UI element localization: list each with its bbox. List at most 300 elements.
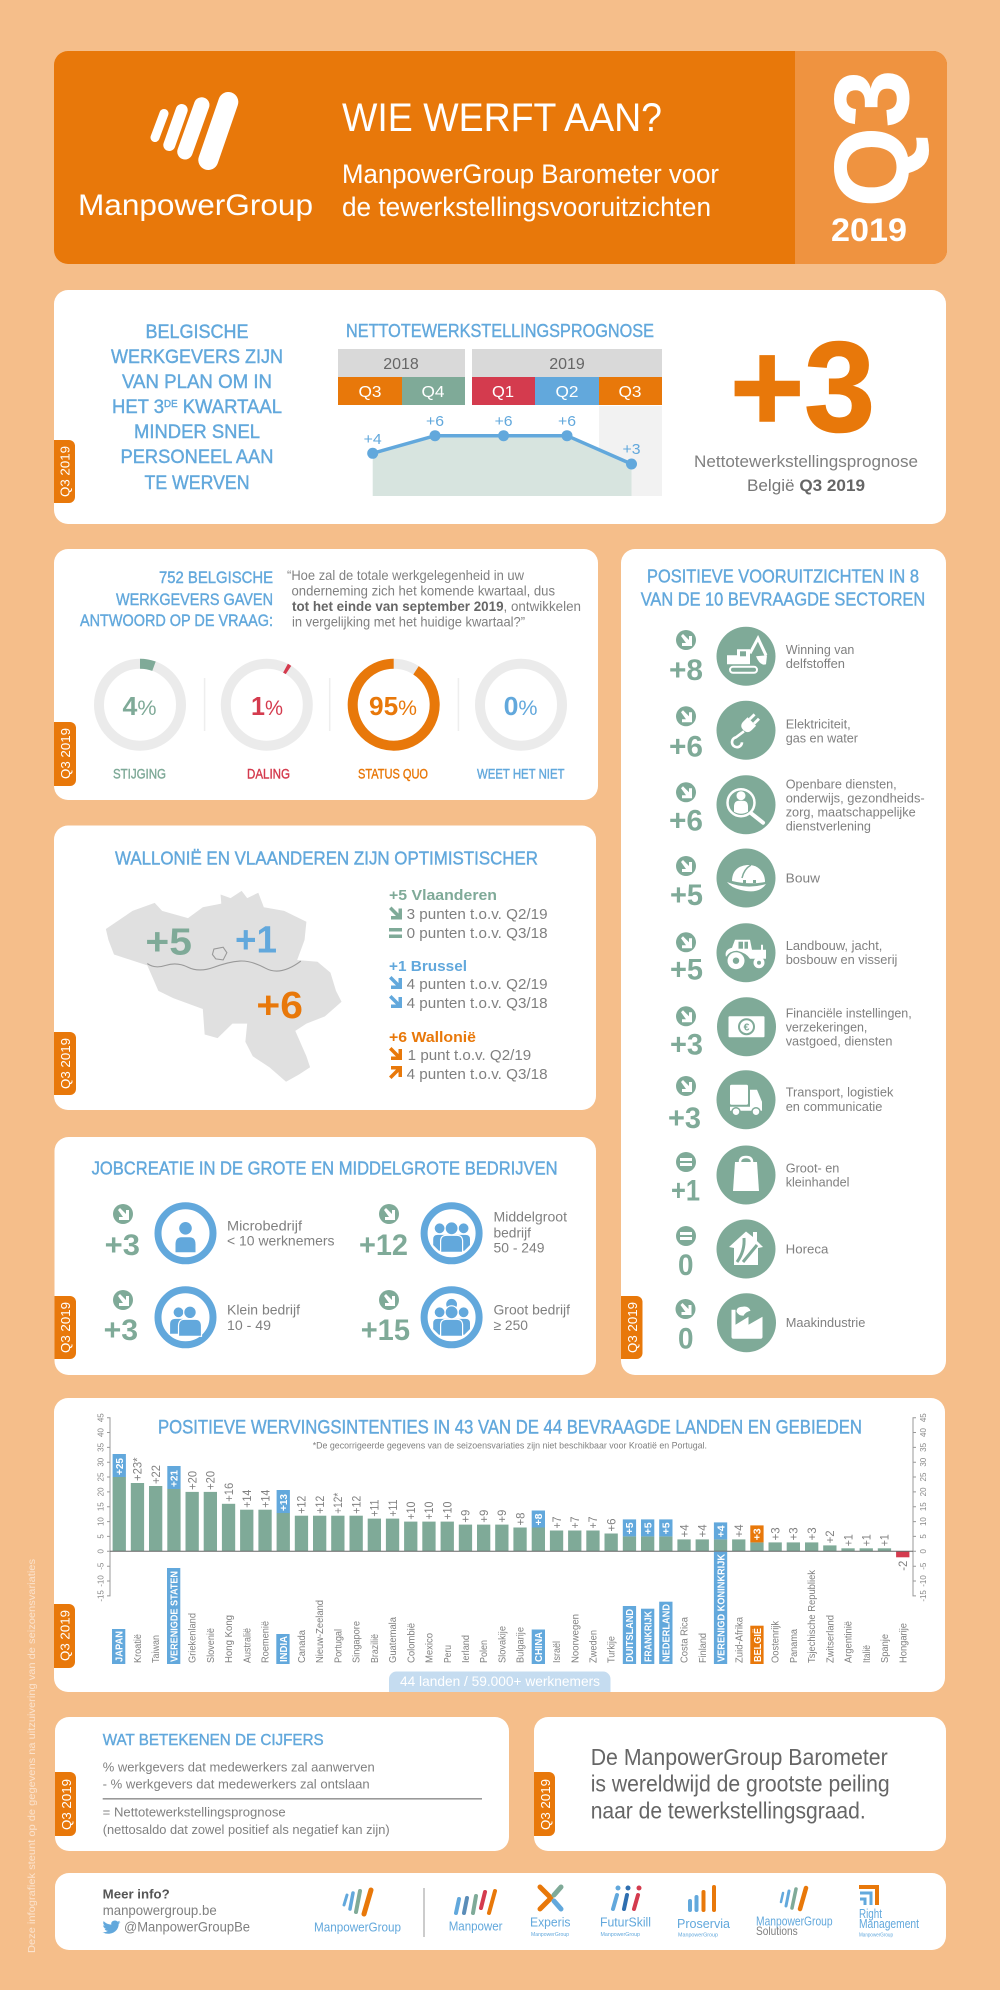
left axis	[96, 1413, 110, 1602]
chart: quarter table: 2018	[383, 356, 419, 373]
sector: financiële instellingen: +3	[670, 1029, 703, 1062]
bar chart: highlighted value tags: +21	[169, 1470, 181, 1487]
sample size pill: 44 landen / 59.000+ werknemers	[400, 1673, 600, 1689]
logo: Experis: Experis	[530, 1915, 571, 1930]
right axis: 45	[919, 1413, 928, 1422]
size: groot: ≥ 250	[494, 1317, 528, 1333]
bar chart: highlighted value tags: +5	[661, 1522, 673, 1534]
sector: landbouw: bosbouw en visserij	[786, 952, 898, 967]
left axis: 40	[96, 1428, 106, 1437]
bar chart: value labels: +22	[149, 1465, 163, 1484]
bar chart: country labels: Costa Rica	[679, 1617, 691, 1663]
left axis: -10	[96, 1575, 106, 1587]
size: groot: Groot bedrijf	[494, 1301, 570, 1317]
bar chart: country labels: Australië	[241, 1628, 253, 1663]
tag: Q3 2019	[58, 728, 73, 779]
right axis: 15	[919, 1502, 928, 1511]
right axis: -10	[919, 1575, 928, 1587]
sector: groot- en kleinhandel	[671, 1146, 850, 1208]
size: klein	[104, 1290, 300, 1347]
bar chart: country labels: Argentinië	[843, 1621, 855, 1663]
question text: in vergelijking met het huidige kwartaal?”	[292, 614, 525, 630]
sector: groot- en kleinhandel: kleinhandel	[786, 1174, 850, 1189]
panel: what the numbers mean	[55, 1717, 509, 1851]
bar chart: country labels: Israël	[551, 1641, 563, 1663]
formula text: % werkgevers dat medewerkers zal aanwerven	[103, 1760, 375, 1775]
size: klein: Klein bedrijf	[227, 1301, 300, 1317]
bar chart: country labels: Slovenië	[205, 1628, 217, 1663]
sector: openbare diensten	[669, 775, 925, 838]
question text: “Hoe zal de totale werkgelegenheid in uw	[287, 567, 525, 583]
right axis: 5	[919, 1534, 928, 1539]
panel: regions	[54, 826, 596, 1110]
right axis: 30	[919, 1457, 928, 1467]
bar chart: highlighted country labels: JAPAN	[114, 1631, 126, 1662]
title: WIE WERFT AAN?	[342, 96, 662, 140]
sector: bouw: +5	[670, 879, 703, 912]
tag: Q3 2019	[58, 1038, 73, 1089]
bar chart: highlighted country labels: NEDERLAND	[662, 1604, 672, 1662]
bar chart: country labels: Noorwegen	[569, 1614, 581, 1663]
heading: WERKGEVERS GAVEN	[116, 591, 273, 609]
size: micro: Microbedrijf	[227, 1218, 302, 1234]
bar chart: value labels: +1	[860, 1534, 874, 1546]
sector: openbare diensten: +6	[669, 805, 703, 838]
panel: national forecast	[54, 290, 946, 524]
bar chart: value labels: +10	[440, 1501, 454, 1520]
bar chart: highlighted value tags: +25	[114, 1458, 126, 1475]
bar chart: value labels: +3	[787, 1527, 801, 1540]
bar chart: country labels: Singapore	[351, 1621, 363, 1663]
bar chart: country labels: Bulgarije	[515, 1627, 527, 1663]
map values: +1	[235, 920, 277, 962]
contact info: @ManpowerGroupBe	[124, 1919, 250, 1935]
bar chart: country labels: Roemenië	[260, 1621, 272, 1663]
donut: daling	[226, 664, 308, 782]
logo: Right Management: Right	[859, 1907, 882, 1921]
bar chart: highlighted country labels	[112, 1552, 764, 1664]
tag: Q3 2019	[59, 1779, 74, 1830]
logo: Proservia	[677, 1887, 731, 1938]
legend: Wallonië: 1 punt t.o.v. Q2/19	[408, 1048, 531, 1064]
right axis: 35	[919, 1442, 928, 1452]
sector: winning van delfstoffen	[669, 627, 854, 687]
logo: FuturSkill: FuturSkill	[600, 1915, 651, 1930]
heading	[80, 569, 273, 630]
chart: forecast line: +6	[558, 413, 576, 430]
bar chart: country labels: Brazilië	[369, 1634, 381, 1663]
left axis: -5	[96, 1562, 106, 1570]
heading: POSITIEVE WERVINGSINTENTIES IN 43 VAN DE 44 BEVRAAGDE LANDEN EN GEBIEDEN	[158, 1417, 862, 1438]
chart: forecast line: +6	[426, 413, 444, 430]
map values	[145, 920, 303, 1027]
bar chart: highlighted country labels: FRANKRIJK	[644, 1610, 654, 1662]
size: klein: +3	[104, 1314, 138, 1347]
text block: headline statement: PERSONEEL AAN	[120, 447, 274, 468]
tag: Q3 2019	[58, 1610, 72, 1661]
logo: Manpower: Manpower	[449, 1919, 503, 1934]
logo: FuturSkill: ManpowerGroup	[600, 1932, 640, 1938]
bar chart: highlighted country labels: CHINA	[534, 1632, 545, 1662]
bar chart: value labels: +4	[732, 1524, 746, 1537]
bar chart: value labels: +20	[204, 1471, 218, 1490]
text block: headline statement: BELGISCHE	[146, 322, 248, 343]
sector: groot- en kleinhandel: Groot- en	[786, 1160, 839, 1175]
text block: headline statement	[111, 322, 283, 494]
chart: forecast line: +6	[495, 413, 513, 430]
bar chart: country labels: Kroatië	[132, 1634, 144, 1663]
bar chart: value labels: +1	[878, 1534, 892, 1546]
bar chart: country labels: Griekenland	[187, 1613, 199, 1663]
donut: stijging: STIJGING	[113, 766, 166, 782]
big value caption: België Q3 2019	[747, 477, 865, 495]
legend: Vlaanderen: +5 Vlaanderen	[389, 887, 497, 904]
donut: status quo	[353, 664, 435, 782]
sector: openbare diensten: zorg, maatschappelijke	[786, 805, 916, 820]
chart: quarter table: Q1	[492, 384, 514, 401]
panel: company size	[54, 1137, 596, 1375]
Q3 side band	[795, 51, 947, 264]
bar chart: value labels: +2	[823, 1530, 837, 1543]
bar chart: baseline	[110, 1550, 913, 1552]
dividers	[205, 678, 458, 731]
bar chart: value labels: +10	[422, 1501, 436, 1520]
tag	[54, 440, 75, 503]
question text: onderneming zich het komende kwartaal, dus	[292, 583, 555, 599]
chart: quarter table: Q3	[618, 384, 642, 401]
statement text: De ManpowerGroup Barometer	[591, 1744, 888, 1770]
chart: quarter table: Q2	[556, 384, 579, 401]
sector: maakindustrie: Maakindustrie	[786, 1315, 865, 1330]
bar chart: value labels: +14	[258, 1489, 272, 1508]
bar chart: country labels: Ierland	[460, 1635, 472, 1663]
tag	[54, 1032, 76, 1095]
tag	[534, 1772, 555, 1836]
bar chart: country labels: Polen	[478, 1640, 490, 1663]
bar chart: country labels: Slovakije	[496, 1626, 508, 1663]
size: klein: 10 - 49	[227, 1317, 271, 1333]
heading: POSITIEVE VOORUITZICHTEN IN 8	[647, 566, 919, 587]
text block: headline statement: WERKGEVERS ZIJN	[111, 347, 283, 368]
heading: 752 BELGISCHE	[159, 569, 273, 587]
bar chart: value labels: +23*	[131, 1457, 145, 1481]
donut: weet het niet: WEET HET NIET	[477, 766, 564, 782]
bar chart: value labels: +14	[240, 1489, 254, 1508]
legend: Brussel: +1 Brussel	[389, 958, 467, 975]
bar chart: highlighted value tags: +5	[642, 1522, 654, 1534]
right axis: 0	[919, 1549, 928, 1554]
legend: Wallonië	[389, 1029, 548, 1083]
bar chart: country labels: Hongarije	[897, 1623, 909, 1663]
question text	[287, 567, 581, 630]
logo: Right Management: ManpowerGroup	[859, 1932, 893, 1938]
chart: quarter table: Q4	[422, 384, 445, 401]
chart: quarter table: 2019	[549, 356, 585, 373]
logo: FuturSkill	[600, 1886, 651, 1938]
legend: Vlaanderen: 3 punten t.o.v. Q2/19	[407, 907, 548, 923]
bar chart: highlighted value tags: +5	[624, 1522, 636, 1534]
sector: landbouw: +5	[670, 953, 703, 986]
formula text: - % werkgevers dat medewerkers zal ontslaan	[103, 1777, 370, 1792]
bar chart: country labels: Spanje	[879, 1634, 891, 1663]
bar chart: value labels: +9	[495, 1509, 509, 1523]
bar chart: value labels: -2	[896, 1560, 910, 1571]
footer divider	[423, 1888, 425, 1937]
bar chart: country labels: Zwitserland	[824, 1615, 836, 1663]
tag: Q3 2019	[58, 1302, 73, 1353]
logo: Experis	[530, 1887, 571, 1938]
bar chart: value labels: +7	[568, 1516, 582, 1528]
sector: horeca: 0	[678, 1249, 694, 1282]
bar chart: country labels: Mexico	[424, 1633, 436, 1663]
bar chart: country labels: Colombië	[405, 1623, 417, 1663]
bar chart: highlighted country labels: INDIA	[279, 1636, 290, 1662]
right axis: 20	[919, 1487, 928, 1496]
bar chart: value labels: +3	[768, 1527, 782, 1540]
map values: +6	[256, 985, 303, 1027]
logo: Manpower	[449, 1891, 503, 1934]
sector: financiële instellingen: verzekeringen,	[786, 1019, 867, 1034]
sector: financiële instellingen: vastgoed, diensten	[786, 1033, 892, 1048]
panel: countries chart	[54, 1398, 945, 1692]
bar chart: country labels: Hong Kong	[223, 1615, 235, 1663]
formula text: (nettosaldo dat zowel positief als negatief kan zijn)	[103, 1822, 390, 1837]
sector: horeca	[676, 1220, 829, 1282]
chart: quarter table	[338, 349, 662, 405]
question text: tot het einde van september 2019, ontwikkelen	[292, 598, 581, 614]
bar chart: value labels: +4	[696, 1524, 710, 1537]
logo: ManpowerGroup Solutions: ManpowerGroup	[756, 1914, 833, 1929]
bar chart: country labels: Turkije	[606, 1636, 618, 1663]
left axis: 45	[96, 1413, 106, 1422]
bar chart: highlighted country labels: DUITSLAND	[625, 1609, 636, 1662]
tag: Q3 2019	[58, 446, 72, 497]
heading	[641, 566, 925, 610]
sector: landbouw: Landbouw, jacht,	[786, 938, 882, 953]
size: groot: +15	[361, 1314, 410, 1347]
bar chart: value labels: +8	[513, 1512, 527, 1526]
right axis: 25	[919, 1472, 928, 1481]
left axis: 20	[96, 1487, 106, 1496]
bar chart: value labels: +9	[477, 1509, 491, 1523]
logo: Right Management: Management	[859, 1917, 919, 1931]
size: middelgroot: bedrijf	[494, 1224, 531, 1240]
bar chart: country labels: Panama	[788, 1629, 800, 1663]
donut: weet het niet	[477, 664, 564, 782]
sector: landbouw	[670, 923, 898, 986]
text block: headline statement: VAN PLAN OM IN	[122, 372, 272, 393]
bar chart: country labels: Guatemala	[387, 1617, 399, 1663]
logo: ManpowerGroup	[314, 1890, 401, 1935]
chart heading: NETTOTEWERKSTELLINGSPROGNOSE	[346, 320, 654, 341]
contact info: Meer info?	[103, 1886, 170, 1901]
bar chart: highlighted country labels: BELGIË	[751, 1628, 764, 1662]
heading: VAN DE 10 BEVRAAGDE SECTOREN	[641, 589, 925, 610]
tag	[54, 1604, 75, 1668]
size: micro: < 10 werknemers	[227, 1233, 334, 1249]
donut: status quo: STATUS QUO	[358, 766, 428, 782]
logo: Right Management	[859, 1887, 919, 1938]
bar chart: value labels: +3	[805, 1527, 819, 1540]
heading: JOBCREATIE IN DE GROTE EN MIDDELGROTE BEDRIJVEN	[92, 1157, 558, 1178]
bar chart: highlighted value tags: +13	[278, 1494, 290, 1511]
panel: survey answers	[54, 549, 598, 800]
bar chart: country labels: Canada	[296, 1630, 308, 1663]
legend: Vlaanderen: 0 punten t.o.v. Q3/18	[407, 926, 548, 942]
panel: header banner	[54, 51, 947, 264]
big value: +3	[730, 316, 875, 459]
size: groot	[361, 1290, 570, 1347]
chart: forecast line: +4	[364, 431, 382, 448]
icon: ManpowerGroup logo mark	[155, 102, 228, 160]
sector: maakindustrie	[676, 1293, 865, 1355]
bar chart: value labels	[131, 1457, 910, 1571]
sector: transport: en communicatie	[786, 1099, 882, 1114]
logo: Experis: ManpowerGroup	[531, 1932, 569, 1938]
size: middelgroot: 50 - 249	[494, 1240, 545, 1256]
text block: headline statement: KWARTAAL	[178, 397, 282, 418]
bar chart: country labels: Oostenrijk	[770, 1620, 782, 1663]
sector: bouw: Bouw	[786, 871, 821, 886]
bar chart: highlighted value tags: +4	[715, 1525, 727, 1537]
left axis: -15	[96, 1590, 106, 1602]
big value caption	[694, 453, 918, 495]
sector: financiële instellingen: €	[744, 1021, 750, 1033]
tag	[621, 1296, 642, 1359]
bar chart: highlighted country labels: VERENIGD KONINKRIJK	[716, 1553, 728, 1662]
bar chart: value labels: +7	[586, 1516, 600, 1528]
bar chart: country labels: Portugal	[332, 1629, 344, 1663]
big Q3: Q3	[814, 70, 931, 207]
bar chart: country labels: Taiwan	[150, 1635, 162, 1663]
tag	[54, 1296, 76, 1359]
donut: stijging: 4%	[122, 691, 156, 721]
chart: forecast line: +3	[622, 441, 640, 458]
panel: barometer statement	[534, 1717, 946, 1851]
bar chart: country labels: Zweden	[588, 1630, 600, 1663]
donut: weet het niet: 0%	[504, 691, 538, 721]
statement text: is wereldwijd de grootste peiling	[591, 1771, 890, 1797]
statement text	[591, 1744, 890, 1823]
donut: stijging	[99, 664, 181, 782]
sector: transport: Transport, logistiek	[786, 1085, 894, 1100]
legend: Vlaanderen	[389, 887, 548, 942]
sector: maakindustrie: 0	[678, 1322, 694, 1355]
right axis: 40	[919, 1428, 928, 1437]
sector: openbare diensten: onderwijs, gezondheids-	[786, 791, 925, 806]
size: middelgroot: +12	[359, 1229, 408, 1262]
chart: quarter table: Q3	[358, 384, 382, 401]
sector: transport	[668, 1070, 894, 1135]
contact info: manpowergroup.be	[103, 1902, 217, 1918]
sector: financiële instellingen	[670, 997, 912, 1062]
bar chart: value labels: +10	[404, 1501, 418, 1520]
sector: elektriciteit: gas en water	[786, 730, 859, 745]
size: micro: +3	[105, 1229, 140, 1262]
bar chart: value labels: +12*	[331, 1492, 345, 1514]
text block: headline statement: TE WERVEN	[144, 473, 250, 494]
text block: headline statement: DE	[164, 399, 178, 410]
donut: daling: DALING	[247, 766, 290, 782]
legend: Wallonië: 4 punten t.o.v. Q3/18	[407, 1067, 548, 1083]
sector: elektriciteit	[669, 701, 859, 764]
bar chart: country labels: Peru	[442, 1645, 454, 1663]
bar chart: value labels: +11	[386, 1499, 400, 1517]
bar chart: country labels: Finland	[697, 1633, 709, 1663]
subtitle line 2: de tewerkstellingsvooruitzichten	[342, 192, 711, 222]
bar chart: highlighted value tags: +3	[752, 1528, 764, 1540]
left axis: 25	[96, 1472, 106, 1481]
bar chart: value labels: +20	[185, 1471, 199, 1490]
map values: +5	[145, 922, 192, 964]
heading: ANTWOORD OP DE VRAAG:	[80, 612, 273, 630]
sector: elektriciteit: +6	[669, 731, 703, 764]
bar chart: highlighted value tags	[113, 1454, 764, 1542]
chart: forecast line	[364, 406, 662, 496]
tag: Q3 2019	[538, 1779, 553, 1830]
bar chart: highlighted value tags: +8	[533, 1513, 545, 1526]
logo: ManpowerGroup Solutions: Solutions	[756, 1924, 798, 1938]
panel: sectors	[621, 549, 946, 1375]
left axis: 10	[96, 1517, 106, 1526]
logo: Proservia: ManpowerGroup	[678, 1932, 718, 1938]
logo wordmark: ManpowerGroup	[78, 189, 313, 222]
sector: winning van delfstoffen: Winning van	[786, 642, 854, 657]
right axis: -15	[919, 1590, 928, 1602]
sector: elektriciteit: Elektriciteit,	[786, 716, 851, 731]
size: middelgroot	[359, 1204, 567, 1262]
bar chart: value labels: +12	[295, 1495, 309, 1514]
heading: WAT BETEKENEN DE CIJFERS	[103, 1732, 324, 1749]
size: middelgroot: Middelgroot	[494, 1209, 567, 1225]
left axis: 0	[96, 1549, 106, 1554]
contact info	[102, 1886, 250, 1935]
left axis: 15	[96, 1502, 106, 1511]
subtitle line 1: ManpowerGroup Barometer voor	[342, 159, 719, 189]
legend: Brussel: 4 punten t.o.v. Q2/19	[407, 977, 548, 993]
right axis	[913, 1413, 928, 1602]
sector: financiële instellingen: Financiële instellingen,	[786, 1005, 912, 1020]
bar chart: bars	[113, 1477, 909, 1557]
logo: Proservia: Proservia	[677, 1916, 731, 1931]
bar chart: country labels: Italië	[861, 1645, 873, 1663]
bar chart: highlighted country labels: VERENIGDE STATEN	[170, 1571, 180, 1662]
tag	[54, 722, 76, 786]
logo: ManpowerGroup: ManpowerGroup	[314, 1920, 401, 1935]
bar chart: value labels: +7	[550, 1516, 564, 1528]
legend: Brussel: 4 punten t.o.v. Q3/18	[407, 996, 548, 1012]
donut: status quo: 95%	[369, 691, 417, 721]
sector: horeca: Horeca	[786, 1242, 829, 1257]
donut: daling: 1%	[251, 691, 283, 721]
legend: Brussel	[389, 958, 548, 1012]
sector: winning van delfstoffen: +8	[669, 654, 703, 687]
size: micro	[105, 1204, 334, 1262]
map of Belgium	[106, 891, 342, 1082]
right axis: -5	[919, 1562, 928, 1570]
left axis: 5	[96, 1534, 106, 1539]
text block: headline statement: MINDER SNEL	[134, 422, 260, 443]
sector: groot- en kleinhandel: +1	[671, 1175, 700, 1208]
legend: Wallonië: +6 Wallonië	[389, 1029, 476, 1046]
text block: headline statement: HET 3	[112, 397, 166, 418]
bar chart: value labels: +12	[349, 1495, 363, 1514]
heading: WALLONIË EN VLAANDEREN ZIJN OPTIMISTISCHER	[115, 847, 538, 868]
bar chart: country labels: Nieuw-Zeeland	[314, 1600, 326, 1663]
bar chart: value labels: +6	[604, 1518, 618, 1532]
left axis: 35	[96, 1442, 106, 1452]
tag	[55, 1772, 76, 1836]
